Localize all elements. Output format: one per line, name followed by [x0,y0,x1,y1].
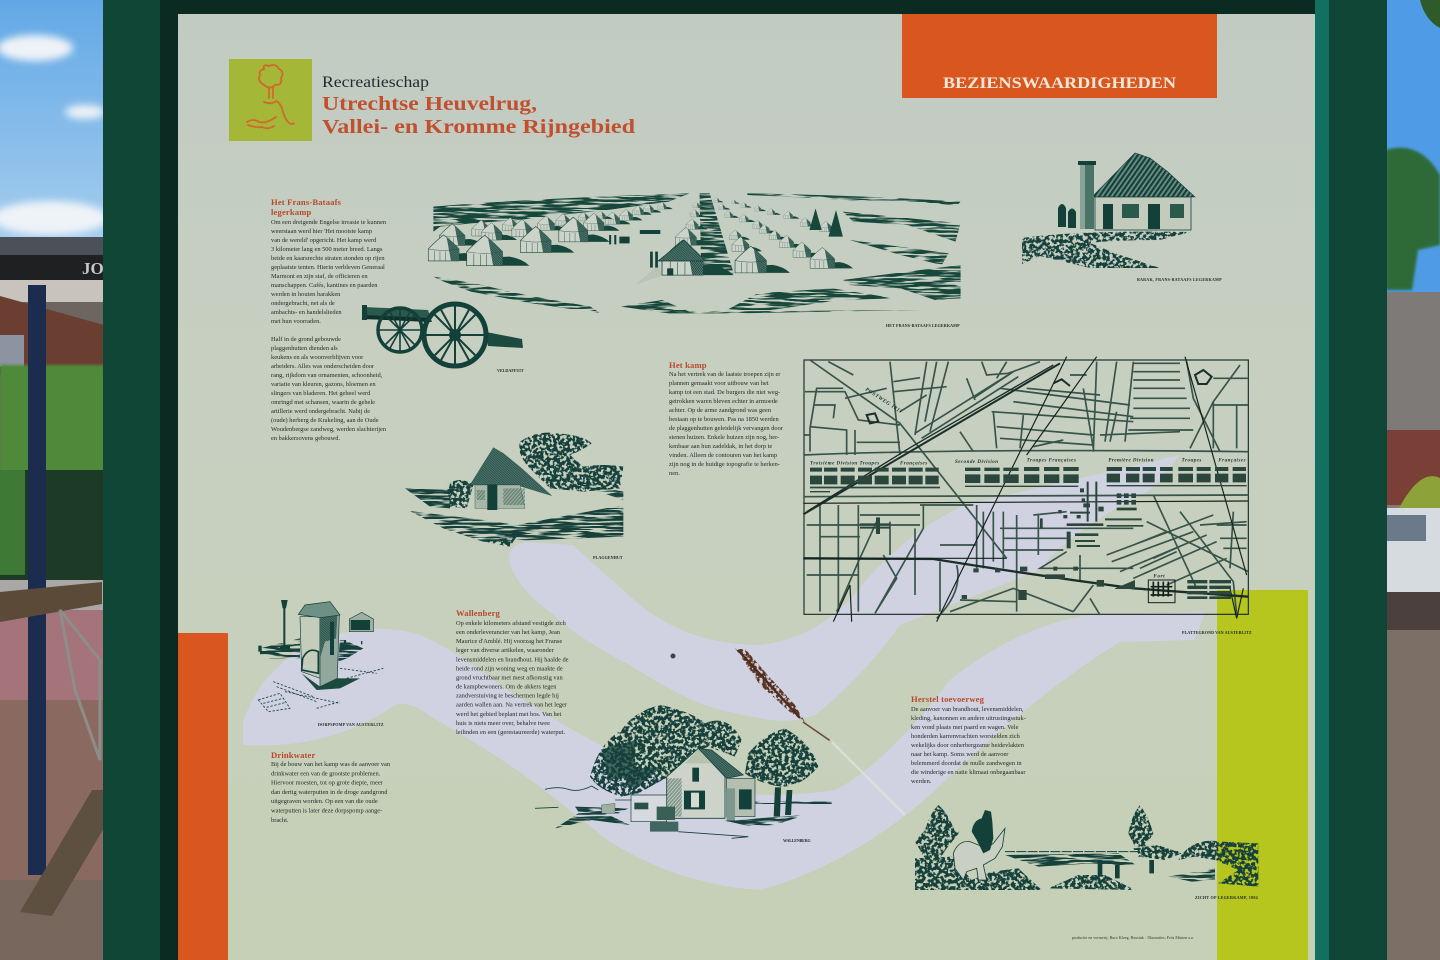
body text: Het kamp: getrokken waren bleven echter in armoede [669,398,778,405]
body text: Het kamp: vinden. Alleen de contouren van het kamp [669,452,777,459]
body text: Herstel toevoerweg: ken vond plaats met paard en wagen. Vele [911,724,1019,731]
header banner: BEZIENSWAARDIGHEDEN [943,75,1176,92]
illustration caption: sod hut: PLAGGENHUT [593,555,623,560]
body text: Herstel toevoerweg: kleding, kanonnen en andere uitrustingsstuk- [911,715,1026,722]
illustration caption: barrack: BARAK, FRANS-BATAAFS LEGERKAMP [1137,277,1222,282]
body text: Wallenberg: een onderleverancier van het kamp, Jean [456,629,561,636]
body text: Herstel toevoerweg: wekelijks door onherbergzame heidevlakten [911,742,1025,749]
body text: Het kamp: plannen gemaakt voor uitbouw van het [669,380,769,387]
body text: Wallenberg: Maurice d'Amblé. Hij voorzag het Franse [456,638,562,645]
map text labels: Fort [1153,574,1165,580]
illustration: view of camp 1804 [915,805,1258,890]
body text: Het kamp: bestaan op te bouwen. Pas na 1850 werden [669,416,779,423]
body text: Herstel toevoerweg: die winderige en natte klimaat onbegaanbaar [911,769,1026,776]
body text: Wallenberg: huis is niets meer over, behalve twee [456,720,550,727]
body text: Wallenberg: leilinden en een (gerestaureerde) waterput. [456,729,566,736]
body text: Het Frans-Bataafs legerkamp: slingers van bladeren. Het geheel werd [271,390,371,397]
credit line: productie en vormvrij: Buro Kloeg, Bussink · Illustraties: Frits Minten a.o. [1072,936,1194,941]
body text: Het Frans-Bataafs legerkamp: met hun voorraden. [271,318,321,325]
title block: Utrechtse Heuvelrug, [322,93,537,115]
map of Austerlitz [803,357,1248,622]
map camp blocks [810,467,1247,600]
body text: Het Frans-Bataafs legerkamp [271,197,387,442]
body text: Wallenberg: leger van diverse artikelen, waaronder [456,647,555,654]
body text: Het Frans-Bataafs legerkamp: (oude) herberg de Krakeling, aan de Oude [271,417,379,424]
map text labels [810,387,1246,580]
body text: Het Frans-Bataafs legerkamp: arbeiders. Alles was onderscheiden door [271,363,375,370]
body text: Drinkwater: bracht. [271,817,289,824]
body text: Het kamp: Na het vertrek van de laatste troepen zijn er [669,371,781,378]
body text: Het Frans-Bataafs legerkamp: 3 kilometer lang en 500 meter breed. Langs [271,246,383,253]
illustration: barrack hut [1022,153,1195,268]
map text labels: Françaises [1218,459,1246,464]
body text: Herstel toevoerweg: honderden karrenvrachten worstelden zich [911,733,1021,740]
body text: Het Frans-Bataafs legerkamp: artillerie werd ondergebracht. Nabij de [271,408,370,415]
body text: Het Frans-Bataafs legerkamp: Half in de grond gebouwde [271,336,341,343]
body text: Het kamp [669,360,784,477]
body text: Het Frans-Bataafs legerkamp: Marmont en zijn staf, de officieren en [271,273,368,280]
body text: Het Frans-Bataafs legerkamp: legerkamp [271,207,312,217]
body text: Het Frans-Bataafs legerkamp: keukens en als woonverblijven voor [271,354,364,361]
illustration: field cannon [362,304,523,366]
map text labels: Seconde Division [955,460,999,465]
body text: Het kamp: zijn nog in de huidige topografie te herken- [669,461,780,468]
photo background: left street scene: JO [82,259,104,278]
body text: Het kamp: Het kamp [669,360,707,370]
body text: Wallenberg: zandverstuiving te beschermen legde hij [456,693,559,700]
map text labels: Troisième Division Troupes [810,461,880,466]
map text labels: Troupes Françaises [1027,459,1076,464]
body text: Drinkwater: Drinkwater [271,750,315,760]
body text: Het kamp: de plaggenhutten geleidelijk vervangen door [669,425,784,432]
body text: Het Frans-Bataafs legerkamp: plaggenhutten dienden als [271,345,338,352]
title block [322,74,636,138]
illustration caption: cannon: VELDAFFUIT [497,368,524,373]
body text: Het Frans-Bataafs legerkamp: manschappen. Cafés, kantines en paarden [271,282,378,289]
body text: Het kamp: kamp tot een stad. De burgers die niet weg- [669,389,780,396]
body text: Drinkwater: uitgegraven worden. Op een van die oude [271,798,378,805]
decorative ribbon: route band two [509,455,1180,721]
body text: Het Frans-Bataafs legerkamp: Woudenbergse zandweg, werden slachterijen [271,426,387,433]
illustration caption: Wallenberg: WALLENBERG [783,838,811,843]
body text: Het Frans-Bataafs legerkamp: Het Frans-Bataafs [271,197,342,207]
title block: Recreatieschap [322,74,429,91]
body text: Het Frans-Bataafs legerkamp: rang, rijkdom van ornamenten, schoonheid, [271,372,383,379]
sign panel background [178,14,1315,960]
body text: Het kamp: nen. [669,470,680,477]
title block: Vallei- en Kromme Rijngebied [322,116,636,138]
stain: rust streak [670,648,905,815]
body text: Het Frans-Bataafs legerkamp: variatie van kleuren, gazons, bloemen en [271,381,376,388]
body text: Het Frans-Bataafs legerkamp: omringd met schansen, waarin de gehele [271,399,375,406]
header banner [902,14,1217,98]
illustration: village pump [258,600,383,712]
body text: Wallenberg: heide rond zijn woning weg en maakte de [456,665,563,672]
body text: Wallenberg: levensmiddelen en brandhout. Hij haalde de [456,656,569,663]
map text labels: POSTWEG 1811 [864,387,903,415]
illustration: Wallenberg house [535,705,832,838]
illustration: sod hut [405,433,623,547]
body text: Het Frans-Bataafs legerkamp: werden in houten barakken [271,291,341,298]
decorative ribbon: route band one [243,612,1205,890]
body text: Het Frans-Bataafs legerkamp: beide en kaarsrechte straten stonden op rijen [271,255,385,262]
map text labels: Troupes [1182,459,1202,464]
body text: Herstel toevoerweg [911,694,1026,785]
body text: Herstel toevoerweg: Herstel toevoerweg [911,694,985,704]
photo background: left street scene [0,0,108,960]
body text: Wallenberg: Wallenberg [456,608,501,618]
body text: Wallenberg: de kampbewoners. Om de akkers tegen [456,684,557,691]
body text: Drinkwater: drinkwater een van de grootste problemen. [271,770,381,777]
orange panel: left [178,633,228,960]
body text: Wallenberg: werd het gebied beplant met bos. Van het [456,711,562,718]
body text: Het Frans-Bataafs legerkamp: weerstaan werd hier 'Het mooiste kamp [271,228,372,235]
body text: Herstel toevoerweg: belemmerd doordat de mulle zandwegen in [911,760,1022,767]
illustration caption: camp: HET FRANS-BATAAFS LEGERKAMP [886,323,960,328]
body text: Het Frans-Bataafs legerkamp: en bakkersovens gebouwd. [271,435,340,442]
body text: Wallenberg [456,608,569,736]
map text labels: Première Division [1108,459,1154,464]
logo [229,59,312,141]
body text: Herstel toevoerweg: naar het kamp. Soms werd de aanvoer [911,751,1009,758]
map text labels: Françaises [900,461,928,466]
body text: Het kamp: stenen huizen. Enkele huizen zijn nog, her- [669,434,779,441]
illustration caption: view of camp: ZICHT OP LEGERKAMP, 1804 [1195,895,1258,900]
body text: Het Frans-Bataafs legerkamp: geplaatste tenten. Hierin verbleven Generaal [271,264,385,271]
body text: Drinkwater [271,750,391,824]
body text: Het Frans-Bataafs legerkamp: van de wereld' opgericht. Het kamp werd [271,237,377,244]
body text: Het Frans-Bataafs legerkamp: ondergebracht, net als de [271,300,335,307]
body text: Drinkwater: dan dertig waterputten in de droge zandgrond [271,789,388,796]
body text: Drinkwater: waterputten is later deze dorpspomp aange- [271,808,382,814]
body text: Het kamp: kenbaar aan hun zadeldak, in het dorp te [669,443,772,450]
body text: Drinkwater: Bij de bouw van het kamp was de aanvoer van [271,761,391,768]
body text: Het Frans-Bataafs legerkamp: Om een dreigende Engelse invasie te kunnen [271,219,387,226]
body text: Het Frans-Bataafs legerkamp: ambachts- en handelslieden [271,309,342,316]
illustration caption: village pump: DORPSPOMP VAN AUSTERLITZ [318,722,384,727]
photo background: right street scene [1386,0,1440,960]
body text: Wallenberg: Op enkele kilometers afstand vestigde zich [456,620,567,627]
body text: Wallenberg: aarden wallen aan. Na vertrek van het leger [456,702,568,709]
body text: Herstel toevoerweg: werden. [911,778,932,785]
illustration: camp panorama [428,193,961,313]
body text: Drinkwater: Hiervoor moesten, tot op grote diepte, meer [271,780,384,787]
lime panel: right [1217,590,1308,960]
body text: Het kamp: achter. Op de arme zandgrond was geen [669,407,772,414]
illustration caption: map: PLATTEGROND VAN AUSTERLITZ [1182,630,1252,635]
body text: Wallenberg: grond vruchtbaar met mest afkomstig van [456,674,563,681]
body text: Herstel toevoerweg: De aanvoer van brandhout, levensmiddelen, [911,706,1024,713]
